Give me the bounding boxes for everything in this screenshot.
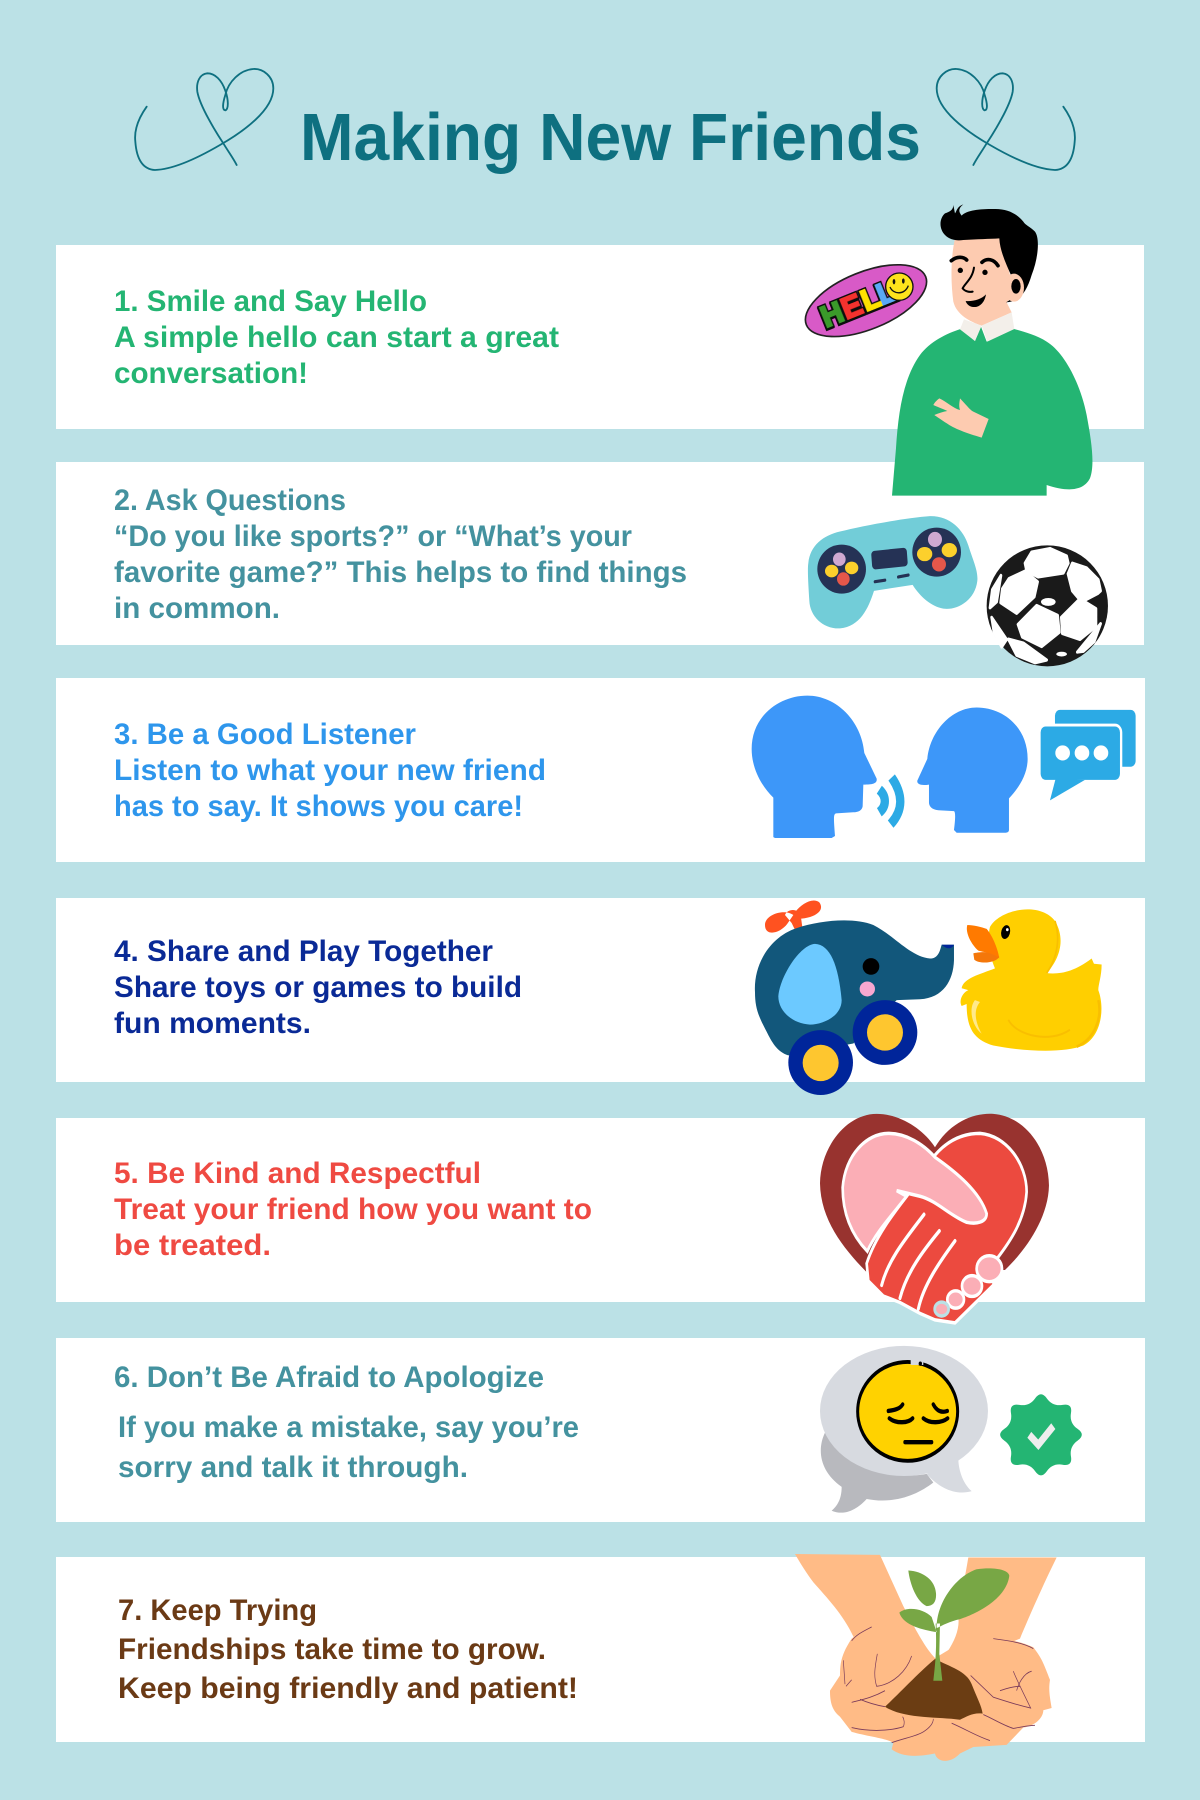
icon: handshake heart	[820, 1114, 1049, 1323]
icon: green check badge	[1000, 1394, 1082, 1475]
text: share and play together	[114, 935, 522, 1040]
text: smile and say hello: conversation!	[114, 357, 308, 390]
text: be a good listener: Listen to what your new friend	[114, 754, 546, 787]
icon: right scribble heart	[937, 69, 1075, 170]
icon: hello sticker: L	[856, 281, 885, 318]
text: ask questions: “Do you like sports?” or “What’s your	[114, 520, 632, 553]
text: smile and say hello: A simple hello can start a great	[114, 321, 559, 354]
icon: hello sticker: L	[872, 274, 901, 312]
icon: rubber duck	[961, 909, 1102, 1051]
icon: speaking heads	[752, 696, 1028, 838]
text: be a good listener: has to say. It shows you care!	[114, 790, 523, 823]
text: smile and say hello: 1. Smile and Say Hello	[114, 285, 427, 318]
icon: soccer ball	[987, 545, 1108, 666]
text: share and play together: Share toys or games to build	[114, 971, 522, 1004]
text: be kind and respectful: be treated.	[114, 1229, 271, 1262]
text: keep trying	[118, 1594, 578, 1705]
text: be a good listener	[114, 718, 546, 823]
text: don't be afraid to apologize: 6. Don’t Be Afraid to Apologize	[114, 1361, 544, 1394]
text: ask questions: 2. Ask Questions	[114, 484, 346, 517]
text: keep trying: 7. Keep Trying	[118, 1594, 317, 1627]
text: don't be afraid to apologize: sorry and talk it through.	[118, 1451, 468, 1484]
icon: game controller	[808, 516, 977, 628]
icon: hello sticker: E	[837, 288, 867, 326]
text: be kind and respectful: 5. Be Kind and Respectful	[114, 1157, 481, 1190]
icon: toy elephant	[755, 900, 954, 1095]
icon: left scribble heart	[135, 69, 273, 170]
panel: step 1	[56, 245, 1144, 429]
text: don't be afraid to apologize	[114, 1361, 579, 1484]
text: keep trying: Keep being friendly and patient!	[118, 1672, 578, 1705]
panel: step 7	[56, 1557, 1145, 1742]
text: ask questions	[114, 484, 687, 625]
text: keep trying: Friendships take time to grow.	[118, 1633, 546, 1666]
panel: step 6	[56, 1338, 1145, 1522]
panel: step 3	[56, 678, 1145, 862]
text: share and play together: 4. Share and Play Together	[114, 935, 493, 968]
icon: chat bubbles	[1041, 710, 1136, 800]
text: don't be afraid to apologize: If you make a mistake, say you’re	[118, 1411, 579, 1444]
text: ask questions: in common.	[114, 592, 280, 625]
text: be a good listener: 3. Be a Good Listener	[114, 718, 416, 751]
text: share and play together: fun moments.	[114, 1007, 311, 1040]
icon: hands holding a seedling	[795, 1554, 1057, 1761]
panel: step 5	[56, 1118, 1145, 1302]
text: be kind and respectful	[114, 1157, 592, 1262]
icon: smiling man in green sweater	[892, 204, 1092, 496]
text: smile and say hello	[114, 285, 559, 390]
text: be kind and respectful: Treat your friend how you want to	[114, 1193, 592, 1226]
icon: sad face speech bubble	[820, 1346, 988, 1513]
title: Making New Friends	[300, 100, 921, 175]
icon: hello sticker	[796, 250, 936, 351]
panel: step 4	[56, 898, 1145, 1082]
text: ask questions: favorite game?” This helps to find things	[114, 556, 687, 589]
panel: step 2	[56, 462, 1144, 645]
icon: hello sticker: H	[816, 296, 848, 334]
